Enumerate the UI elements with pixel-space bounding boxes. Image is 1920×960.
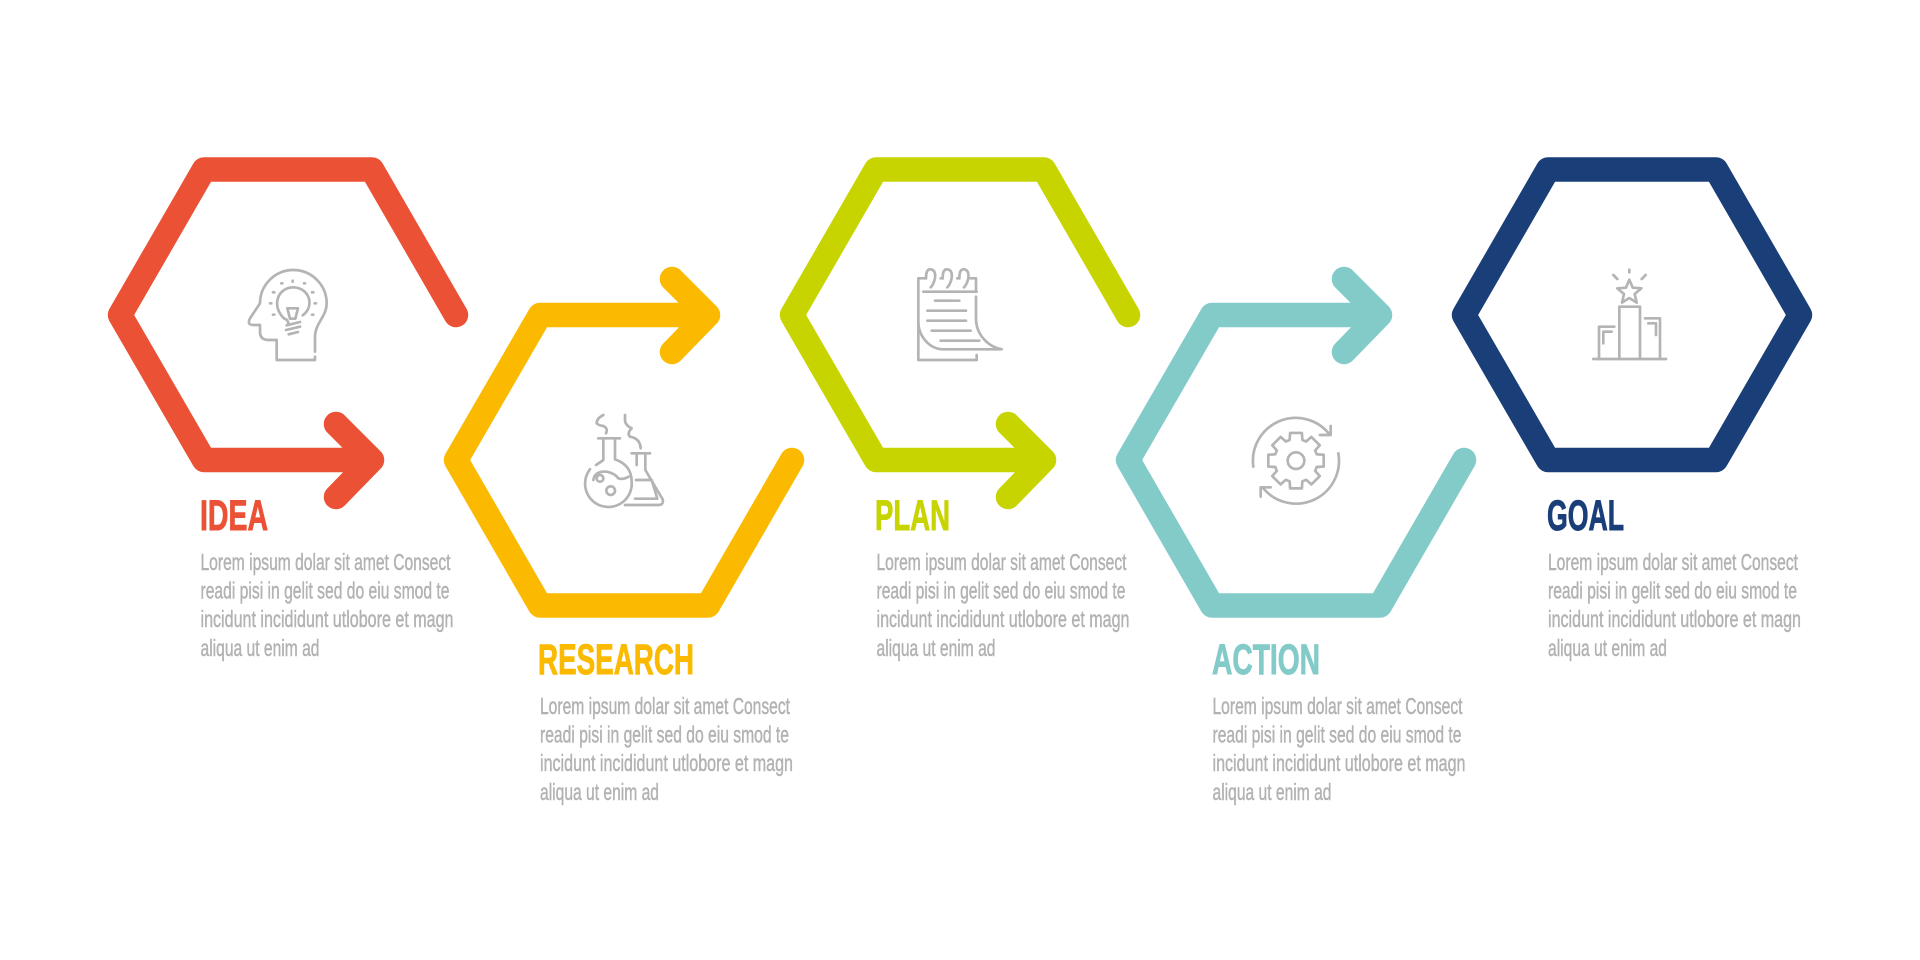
step 5: goal <box>1464 170 1801 661</box>
icon: chemistry flasks <box>585 415 663 507</box>
text block: goal: aliqua ut enim ad <box>1548 635 1667 661</box>
step 2: research <box>456 279 793 805</box>
text block: idea: readi pisi in gelit sed do eiu smod te <box>200 578 450 604</box>
text block: research: readi pisi in gelit sed do eiu smod te <box>540 722 789 748</box>
text block: idea: aliqua ut enim ad <box>200 635 320 661</box>
text block: research: incidunt incididunt utlobore et magn <box>540 750 793 776</box>
hexagon arrow: action <box>1128 279 1464 606</box>
text block: action: aliqua ut enim ad <box>1212 779 1332 805</box>
step 4: action <box>1128 279 1466 805</box>
text block: goal: Lorem ipsum dolar sit amet Consect <box>1548 549 1798 575</box>
text block: plan: aliqua ut enim ad <box>876 635 996 661</box>
icon: notepad <box>918 269 1002 360</box>
heading: idea: IDEA <box>200 492 268 540</box>
text block: goal: readi pisi in gelit sed do eiu smod te <box>1548 578 1797 604</box>
text block: action: Lorem ipsum dolar sit amet Consect <box>1212 693 1463 719</box>
heading: goal: GOAL <box>1547 492 1624 540</box>
hexagon arrow: plan <box>792 170 1128 497</box>
text block: research: aliqua ut enim ad <box>540 779 659 805</box>
text block: research: Lorem ipsum dolar sit amet Consect <box>540 693 790 719</box>
text block: plan <box>876 549 1130 661</box>
text block: idea: incidunt incididunt utlobore et magn <box>200 606 454 632</box>
text block: plan: incidunt incididunt utlobore et magn <box>876 606 1130 632</box>
text block: idea <box>200 549 454 661</box>
icon: gear with cycle arrows <box>1253 418 1339 504</box>
text block: plan: readi pisi in gelit sed do eiu smod te <box>876 578 1126 604</box>
text block: plan: Lorem ipsum dolar sit amet Consect <box>876 549 1127 575</box>
icon: podium with star <box>1593 270 1666 359</box>
text block: research <box>540 693 793 805</box>
text block: idea: Lorem ipsum dolar sit amet Consect <box>200 549 451 575</box>
text block: goal <box>1548 549 1801 661</box>
text block: goal: incidunt incididunt utlobore et magn <box>1548 606 1801 632</box>
text block: action: readi pisi in gelit sed do eiu smod te <box>1212 722 1462 748</box>
heading: research: RESEARCH <box>538 636 694 684</box>
heading: plan: PLAN <box>875 492 950 540</box>
step 3: plan <box>792 170 1130 661</box>
text block: action <box>1212 693 1466 805</box>
icon: head with light bulb <box>249 270 327 360</box>
hexagon arrow: idea <box>120 170 456 497</box>
hexagon arrow: research <box>456 279 792 606</box>
hexagon: goal <box>1464 170 1800 460</box>
text block: action: incidunt incididunt utlobore et magn <box>1212 750 1466 776</box>
heading: action: ACTION <box>1212 636 1320 684</box>
step 1: idea <box>120 170 456 661</box>
